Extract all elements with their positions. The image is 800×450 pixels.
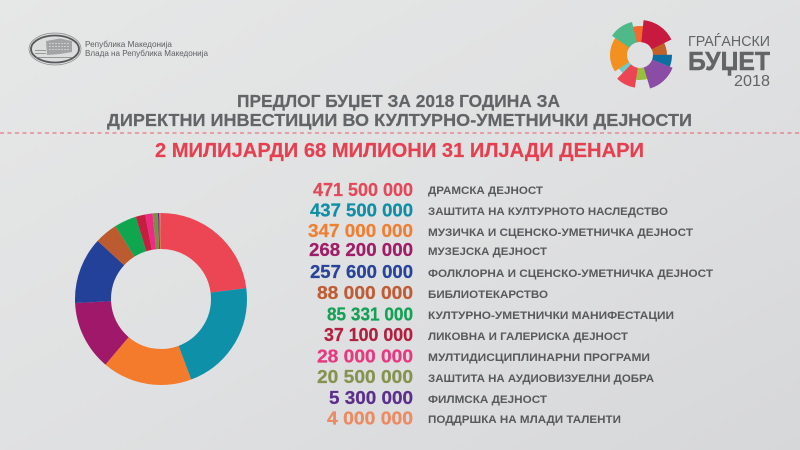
row: music and stage: МУЗИЧКА И СЦЕНСКО-УМЕТНИЧКА ДЕЈНОСТ — [428, 227, 693, 239]
row: cultural events: 85 331 000 — [327, 304, 413, 324]
government name text: Република Македонија — [85, 39, 172, 49]
row: museum: 268 200 000 — [309, 240, 413, 260]
row: cultural events: КУЛТУРНО-УМЕТНИЧКИ МАНИФЕСТАЦИИ — [428, 310, 674, 322]
row: librarianship — [317, 283, 548, 303]
row: audiovisual goods: 20 500 000 — [317, 367, 413, 387]
title: ДИРЕКТНИ ИНВЕСТИЦИИ ВО КУЛТУРНО-УМЕТНИЧКИ ДЕЈНОСТИ — [107, 110, 692, 130]
row: fine art and galleries: 37 100 000 — [324, 325, 413, 345]
row: cultural heritage: ЗАШТИТА НА КУЛТУРНОТО НАСЛЕДСТВО — [428, 206, 668, 218]
logo wordmark: ГРАЃАНСКИ — [688, 33, 770, 50]
row: music and stage: 347 000 000 — [308, 221, 413, 241]
civic budget logo — [616, 31, 770, 90]
row: drama — [313, 180, 543, 200]
title: ПРЕДЛОГ БУЏЕТ ЗА 2018 ГОДИНА ЗА — [237, 91, 560, 111]
row: multidisciplinary programs: 28 000 000 — [317, 346, 413, 366]
row: multidisciplinary programs: МУЛТИДИСЦИПЛИНАРНИ ПРОГРАМИ — [428, 352, 650, 364]
row: folklore: 257 600 000 — [310, 262, 413, 282]
row: cultural heritage — [310, 200, 668, 220]
donut chart — [93, 231, 229, 367]
row: folklore: ФОЛКЛОРНА И СЦЕНСКО-УМЕТНИЧКА ДЕЈНОСТ — [428, 268, 713, 280]
icon: government building emblem — [29, 33, 81, 65]
row: museum — [309, 240, 547, 260]
total amount headline: 2 МИЛИЈАРДИ 68 МИЛИОНИ 31 ИЛЈАДИ ДЕНАРИ — [155, 140, 644, 162]
government name text — [85, 39, 208, 58]
row: music and stage — [308, 221, 693, 241]
title — [107, 91, 692, 130]
row: film — [329, 388, 547, 408]
row: fine art and galleries: ЛИКОВНА И ГАЛЕРИСКА ДЕЈНОСТ — [428, 331, 628, 343]
row: film: 5 300 000 — [329, 388, 413, 408]
row: librarianship: БИБЛИОТЕКАРСТВО — [428, 289, 548, 301]
row: young talents: ПОДДРШКА НА МЛАДИ ТАЛЕНТИ — [428, 414, 621, 426]
government name text: Влада на Република Македонија — [85, 48, 208, 58]
row: multidisciplinary programs — [317, 346, 650, 366]
row: drama: ДРАМСКА ДЕЈНОСТ — [428, 185, 543, 197]
row: fine art and galleries — [324, 325, 628, 345]
row: young talents: 4 000 000 — [327, 408, 413, 428]
budget list — [308, 180, 713, 428]
government logo and name — [29, 33, 208, 65]
icon: multicolour ring — [616, 31, 664, 79]
row: museum: МУЗЕЈСКА ДЕЈНОСТ — [428, 246, 547, 258]
row: cultural events — [327, 304, 674, 324]
row: cultural heritage: 437 500 000 — [310, 200, 413, 220]
row: folklore — [310, 262, 713, 282]
row: audiovisual goods: ЗАШТИТА НА АУДИОВИЗУЕЛНИ ДОБРА — [428, 373, 654, 385]
row: drama: 471 500 000 — [313, 180, 413, 200]
logo wordmark — [688, 33, 770, 90]
row: young talents — [327, 408, 621, 428]
logo wordmark: 2018 — [734, 73, 770, 90]
row: audiovisual goods — [317, 367, 654, 387]
row: librarianship: 88 000 000 — [317, 283, 413, 303]
logo wordmark: БУЏЕТ — [688, 46, 770, 76]
row: film: ФИЛМСКА ДЕЈНОСТ — [428, 394, 547, 406]
